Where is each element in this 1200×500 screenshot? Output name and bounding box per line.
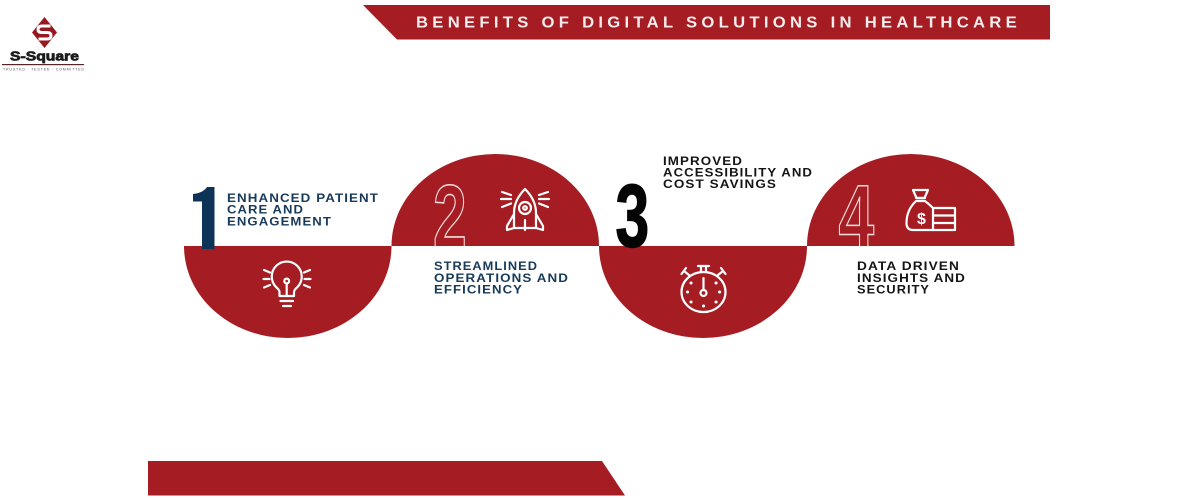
label 4: SECURITY xyxy=(857,282,930,296)
label 2: OPERATIONS AND xyxy=(434,271,569,285)
panel: step 2 streamlined operations xyxy=(392,154,599,296)
title banner xyxy=(363,5,1050,40)
label 2: STREAMLINED xyxy=(434,259,538,273)
half circle 4 xyxy=(807,154,1014,246)
half circle 1 xyxy=(184,246,392,338)
number 4 outline: 4 xyxy=(838,168,874,267)
half circle 2 xyxy=(392,154,599,246)
label 4: DATA DRIVEN xyxy=(857,259,960,273)
title banner: BENEFITS OF DIGITAL SOLUTIONS IN HEALTHCARE xyxy=(416,14,1021,32)
label 3: COST SAVINGS xyxy=(663,177,777,191)
label 3 xyxy=(663,154,813,191)
icon: stopwatch xyxy=(682,266,726,312)
label 1: ENHANCED PATIENT xyxy=(227,191,379,205)
label 1 xyxy=(227,191,379,228)
label 4: INSIGHTS AND xyxy=(857,271,966,285)
icon: light bulb xyxy=(264,262,310,306)
logo: S-Square xyxy=(2,17,84,72)
panel: step 1 enhanced patient care xyxy=(184,187,392,338)
label 4 xyxy=(857,259,966,296)
number 2 outline: 2 xyxy=(433,167,467,267)
label 2: EFFICIENCY xyxy=(434,282,523,296)
number 1 xyxy=(193,187,214,249)
icon: dollar sign: $ xyxy=(917,211,926,228)
label 1: ENGAGEMENT xyxy=(227,214,332,228)
label 3: IMPROVED xyxy=(663,154,743,168)
number 3: 3 xyxy=(616,167,649,266)
panel: step 3 accessibility and cost savings xyxy=(599,154,813,338)
icon: rocket xyxy=(501,189,549,230)
label 1: CARE AND xyxy=(227,202,304,216)
logo: S-Square: TRUSTED · TESTED · COMMITTED xyxy=(3,68,84,72)
number 1: 1 xyxy=(187,168,236,268)
icon: money bag and coins xyxy=(906,190,955,230)
panel: step 4 data driven insights xyxy=(807,154,1014,296)
label 3: ACCESSIBILITY AND xyxy=(663,166,813,180)
half circle 3 xyxy=(599,246,807,338)
logo: S-Square: S-Square xyxy=(10,50,79,64)
footer banner xyxy=(148,461,625,496)
label 2 xyxy=(434,259,569,296)
